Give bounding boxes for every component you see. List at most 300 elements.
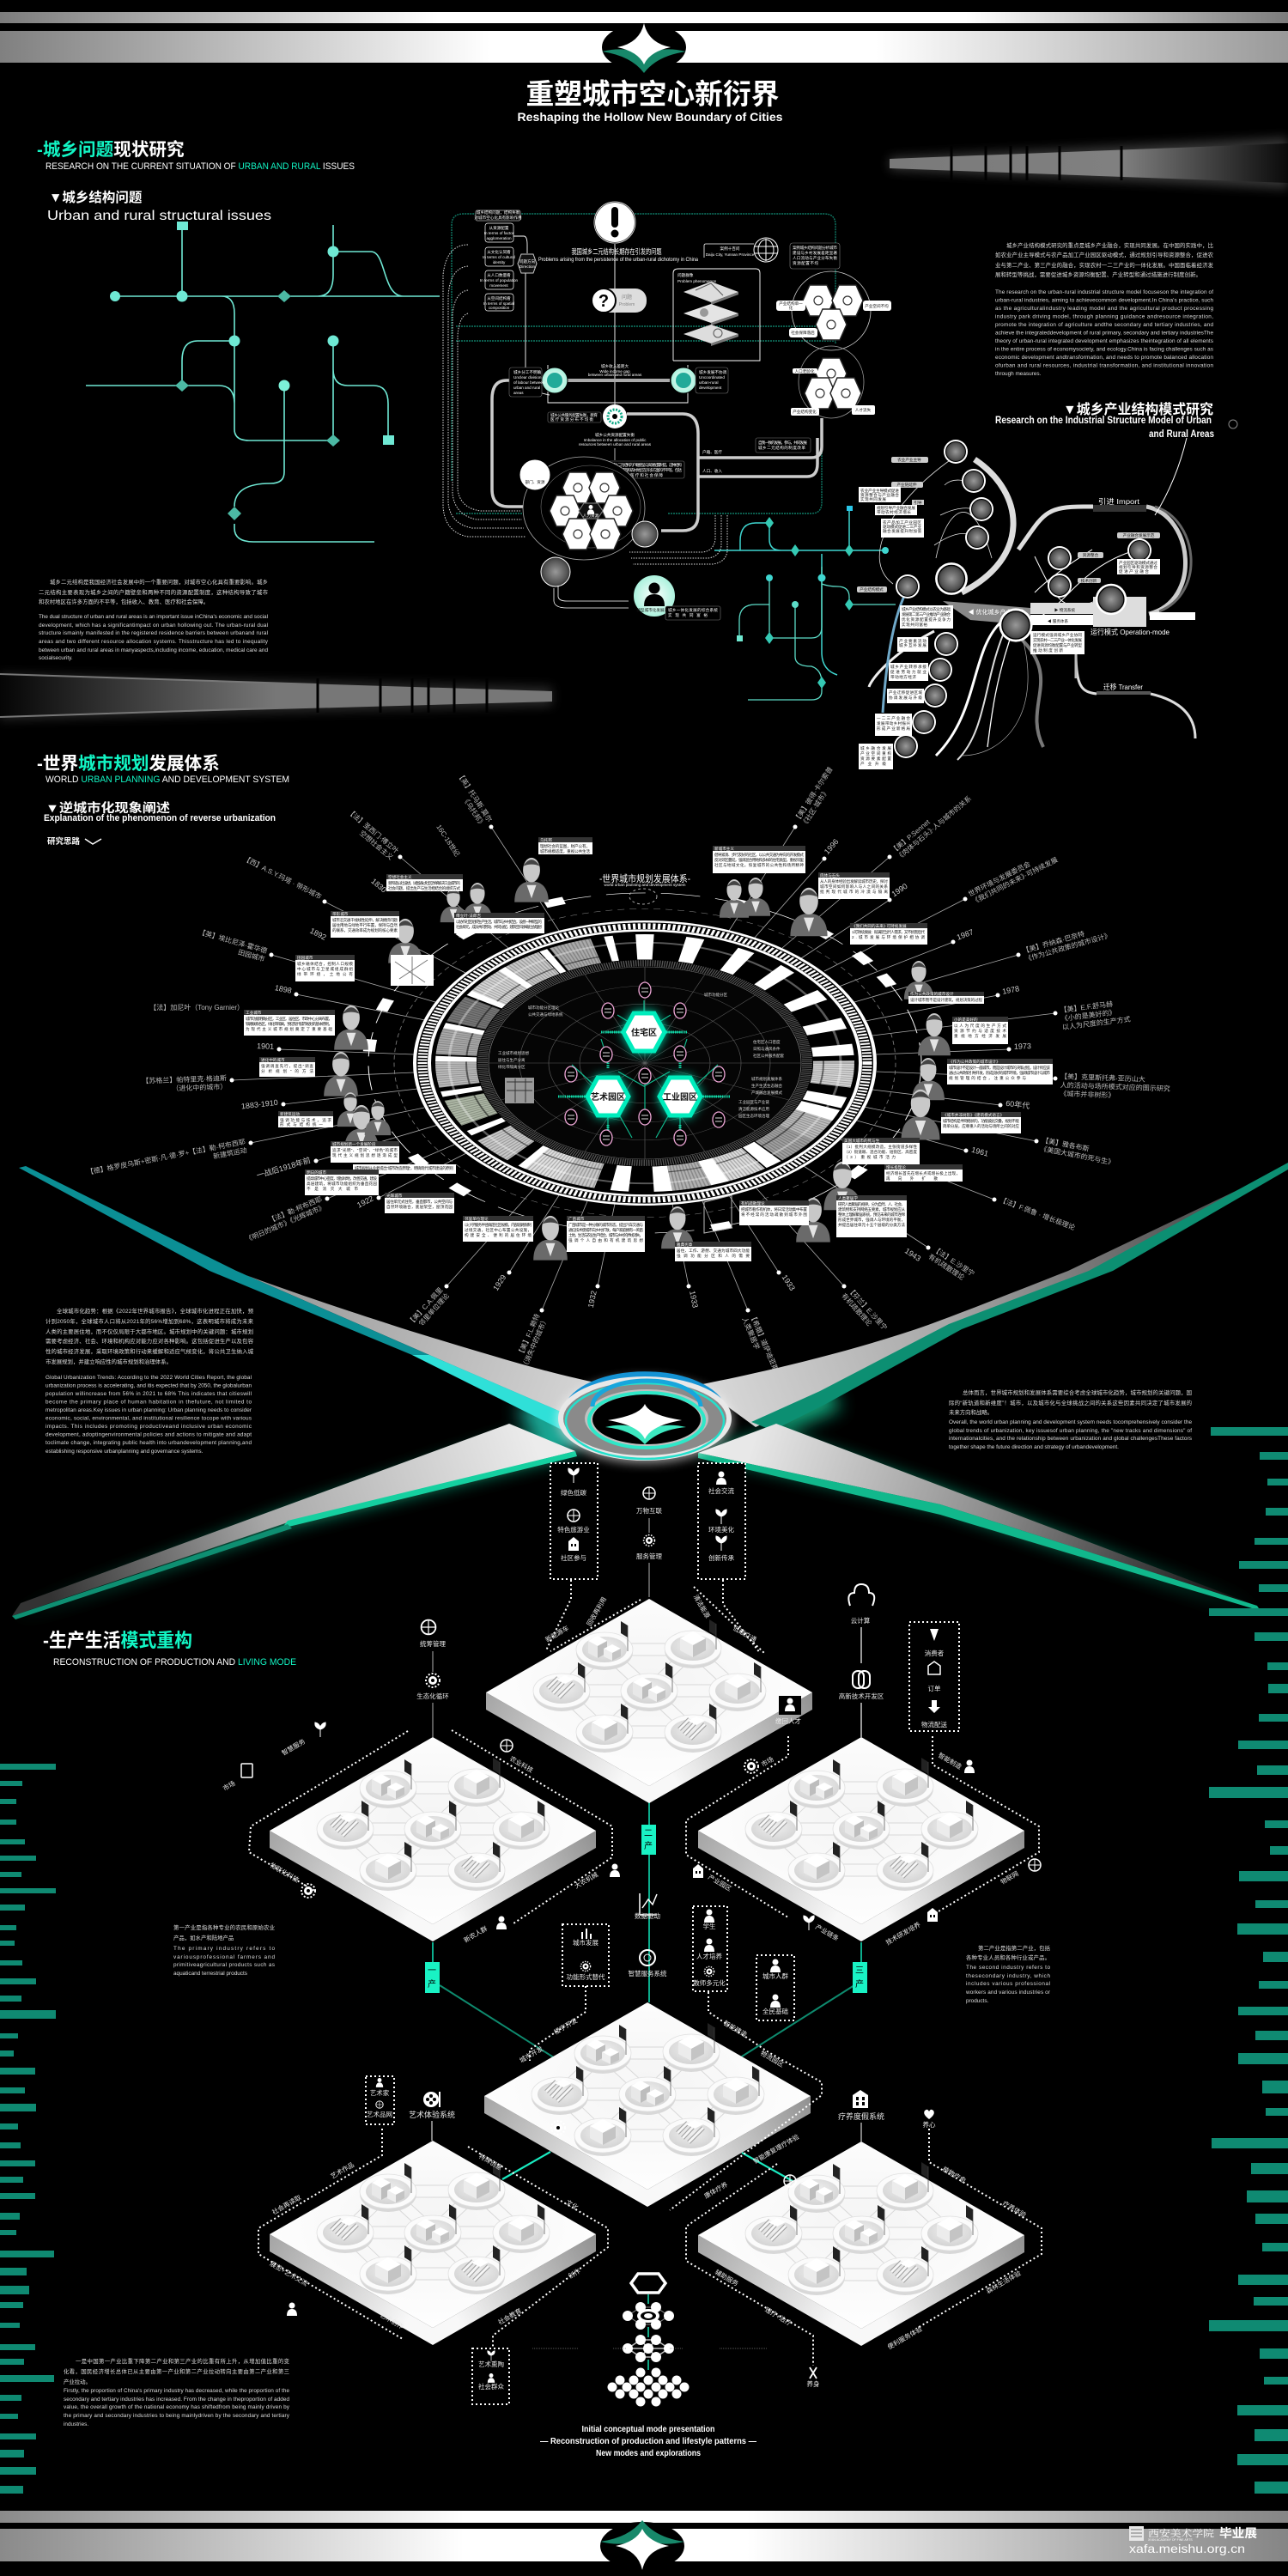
platform: smart service [484,2002,811,2207]
box: our common future: 2.城市发展与环境保护相协调 [852,934,925,940]
dotted box: green low carbon: 绿色低碳 [561,1488,586,1497]
box: garden city [295,955,355,981]
dotted box: green low carbon [550,1463,598,1579]
radial timeline labels: 《社区·城市》 [799,787,830,829]
tag: tertiary industry: 产 [855,1978,864,1990]
dotted box: consumer: 订单 [927,1684,941,1692]
icon: heart: 养心 [922,2120,936,2129]
radial timeline labels: 以人为尺度的生产方式 [1061,1014,1131,1031]
radial timeline labels: 【美】F.L.赖特 [516,1312,541,1358]
small tags and notes: 一二三产业融合 [877,715,910,721]
pink capsule nodes [565,982,725,1145]
box: neighbourhood: 以小学服务半径确定社区规模，内部道路限制 [465,1222,532,1228]
text block: primary industry: 第一产业是指各种专业的农民和原始农业 [173,1923,276,1931]
text block: industrial structure research: 展和转型等挑战，需要促进城乡资源均衡配置、产业转型和通过措施进行制度创新。 [995,270,1201,278]
text block: global urbanization: 性的城市经济发展，采取环境政策和行动来缓解和适应气候变化，将公共卫生纳入城 [46,1347,254,1355]
box: cities in evolution: 强调调查先行，提出"调查 [261,1063,313,1069]
problem row: labour division, income gap, uncoordinated development: 城乡分工不明确 [513,369,542,375]
text block: dual structure: structure ismainly manifested in the registered residence barriers between urbanand rural [39,630,268,636]
icon: gear node [603,404,627,428]
text block: primary industry: 产品，如水产和陆地产品 [173,1934,234,1941]
text block: global urbanization: become the primary place of human habitation in thefuture, not limited to [46,1400,252,1405]
text block: secondary industry: thesecondary industry, which [966,1973,1050,1979]
subheading: reverse urbanization: Explanation of the phenomenon of reverse urbanization [44,813,276,823]
radial timeline labels: 1830 [369,877,388,895]
small tags and notes: 发展带动乡村振兴 [877,720,910,726]
box: pattern: 《作为公共政策的城市设计》 [949,1059,1000,1065]
problem row: labour division, income gap, uncoordinated development: of labour between [513,380,545,385]
text box: person [665,606,720,620]
central hexagon cluster: 人力资源 [583,513,599,519]
inner notes: 住宅区人口密度 [753,1039,781,1045]
box: garden city: 田园城市 [297,955,313,961]
school logo text: XI'AN ACADEMY OF FINE ARTS [1148,2538,1193,2542]
icon: body care: 养身 [807,2379,820,2388]
box: ekistics [836,1195,907,1237]
text block: dual structure: development, which has a significantimpact on urban hollowing out. The urban-rural dual [39,623,268,629]
dotted box: urban development: 城市发展 [573,1938,598,1947]
inner notes: 生产生活生态融合 [751,1083,782,1089]
radial timeline labels: 【法】F.佩鲁 · 增长极理论 [999,1195,1077,1231]
platform edge labels: 产业园区 [707,1873,733,1893]
platform edge labels: 物联化科技 [269,1861,301,1884]
small tags and notes: 技术创新 [1081,578,1097,584]
central ring diagram [351,883,939,1243]
box: broadacre: 广亩城市是一种分散的城市形态，提出汽车交通与 [568,1222,643,1228]
icon: footer star logo [600,2520,684,2570]
icon: art system [409,2092,455,2141]
heading: problems arising: Problems arising from the persistence of the urban-rural dichotomy in China [538,257,698,263]
section heading: world urban planning [37,753,289,785]
small tags and notes: 促进劳动力就业 [890,669,927,675]
radial timeline labels: 1943 [903,1247,922,1263]
small tags and notes: 引导 [914,500,922,506]
radial timeline labels: 有机疏散理论 [840,1291,874,1327]
box: pattern [947,1059,1053,1084]
boxes and flow labels: 收入教育医疗和社会保障 [611,472,663,478]
radial timeline labels: （进化中的城市） [172,1082,227,1092]
problem group panel: Problem phenomenon [677,279,717,283]
boxes and flow labels: 城乡二元结构的制度改革 [758,445,805,451]
text block: industrial structure research: ofurban and rural resources, industrial transformation, and institutional innovation [995,362,1213,369]
box: our common future: 《我们共同的未来》·可持续发展 [852,923,907,929]
text block: dual structure: areas and two different resource allocation systems. Thisstructure has led to inequality [39,639,269,645]
small tags and notes: 城乡产业结构模式以农业为基础 [902,606,951,612]
box: broadacre: 土地，生活与农业生产结合，城市与乡村的界线消失， [568,1232,643,1238]
concept evolution diagram [532,2274,768,2406]
platform edge labels: 产业链条 [814,1923,841,1942]
caption: Initial conceptual mode presentation [582,2424,714,2434]
small tags and notes: 产业链延伸 [897,482,917,488]
box: death and life: （3）重视城市活力 [844,1154,896,1160]
platform edge labels: 植物疗愈 [941,2165,968,2184]
inner notes: 公共交通与绿地系统 [528,1012,563,1018]
inner notes: 园区生态环境治理 [738,1113,769,1119]
box: broadacre [567,1216,645,1252]
platform edge labels: 康体疗养 [702,2179,729,2200]
box: charter note: 城市规划从业者提出"城市改造原理"，明确现代城市建设的原则 [355,1165,453,1171]
central glow hexes: 住宅区 [631,1027,657,1038]
radial timeline labels: 【芬兰】E.沙里宁 [847,1285,889,1332]
text block: industry proportion: industries. [64,2421,88,2427]
text box: person: 城乡一体化发展的综合系统 [668,607,718,613]
radial timeline labels: 1898 [274,983,293,995]
box: utopian socialism [386,874,463,891]
box: growth pole: 再向外扩散 [886,1176,938,1182]
platform edge labels: 市场 [222,1778,237,1792]
text block: industrial structure research: 业与第二产业、第三产业的融合，实现农村一二三产业的一体化发展。中国面临着经济发 [995,261,1214,269]
right column: cloud: 高新技术开发区 [839,1692,884,1700]
title: Reshaping the Hollow New Boundary of Cities [517,110,783,124]
boxes and flow labels: 城乡二元结构的户籍壁垒与资源配置制度，这种结构 [611,462,682,468]
lower left arm [12,1424,577,1619]
text box: case: 人口流动与产业分布失衡 [793,255,837,261]
footer band [0,2511,1288,2570]
box: utopia: 城市规模适度，重视公共生活 [540,848,590,854]
box: new architecture [278,1111,333,1127]
radial timeline labels: 1996 [823,837,841,856]
text block: industry proportion [64,2357,290,2427]
text block: secondary industry: products. [966,1998,989,2004]
subheading: reverse urbanization: 研究思路 [47,836,81,847]
dotted box: social exchange: 创新传承 [708,1553,734,1562]
problem row: labour division, income gap, uncoordinated development: development [699,386,722,390]
section heading: production and living: RECONSTRUCTION OF PRODUCTION AND LIVING MODE [53,1657,296,1668]
dotted box: artists: 艺术家 [370,2088,390,2097]
box: flesh and stone: 从人的身体经验出发解读城市历史，探讨 [820,878,888,884]
side bars: right [1209,1427,1288,2494]
subheading: industrial structure model: Research on the Industrial Structure Model of Urban [995,414,1212,426]
small tags and notes: 融合发展提升附加值 [883,528,921,534]
text block: industrial structure research: through measures. [995,371,1042,377]
box: organic decentralization: 把城市看作有机体，将日常活动集中布置 [741,1206,807,1212]
dotted box: social exchange: 社会交流 [708,1486,734,1495]
problem row: labour division, income gap, uncoordinated development: Uncoordinated [699,375,725,380]
glow [12,1382,1257,1618]
school logo text [1129,2526,1257,2555]
box: small is beautiful [952,1017,1008,1044]
box: tomorrow city: 高层建筑，将城市功能组织为垂直花园 [307,1181,377,1187]
box: phalanx: 傅立叶·法郎吉 [456,913,481,919]
radial timeline labels: 广亩城市（消失中的城市） [509,1315,550,1395]
left question boxes: In terms of spatial [483,301,514,306]
box: new urbanism: 社区与地域文化，恢复城市的公共性和场所精神 [714,862,804,868]
platform edge labels: 创作 [567,2266,582,2280]
text block: secondary industry: 第二产业是指第二产业，包括 [978,1944,1051,1952]
small tags and notes: 资源要素配置 [860,756,891,762]
radial timeline labels: 有机疏散理论 [927,1252,966,1281]
side bars: left [0,1764,56,2494]
inner notes [498,992,784,1119]
dotted box: artists: 艺术品网 [367,2110,392,2118]
box: new architecture: 强调功能与技术，追求 [280,1117,331,1123]
small tags and notes: 带动农村经济增长 [877,509,911,515]
boxes and flow labels: 户籍、医疗 [702,449,722,455]
satellite discs: 部门、资源 [526,479,545,485]
box: charter note [353,1164,456,1174]
box: death and life: （2）街道眼、混合功能、短街区、高密度 [844,1149,917,1155]
left question boxes: In terms of factor [484,231,514,235]
problem row: labour division, income gap, uncoordinated development: 城乡收入差距大 [601,363,629,369]
text block: industrial structure research: promote the integration of agriculture andthe secondary and tertiary industries, and [995,322,1213,328]
hexagon cluster: upper right: 产业结构变化 [793,409,817,415]
dotted box: art edification: 社会群众 [478,2382,504,2391]
box: athens charter: 居住、工作、游憩、交通为城市四大功能 [677,1248,750,1254]
text block: primary industry: aquaticand terrestrial products [173,1971,247,1977]
small tags and notes: 协调发展与升级 [889,695,922,701]
platform edge labels: 回收再利用 [585,1595,608,1627]
box: neighbourhood [463,1216,533,1242]
box: pattern: 城市设计不是设计一座城市，而是设计城市的决策过程，设计师应该 [949,1065,1050,1071]
section heading: urban-rural research: RESEARCH ON THE CURRENT SITUATION OF URBAN AND RURAL ISSUES [46,161,355,172]
platform: top [486,1599,812,1803]
left column: ecology [416,1620,449,1737]
radial timeline labels: 【法】勒·柯布西耶 [267,1194,323,1224]
platform edge labels: 市场 [760,1754,775,1768]
tag: tertiary industry [853,1962,867,1993]
box: cities in evolution: 进化中的城市 [261,1057,285,1063]
problem row: labour division, income gap, uncoordinated development: urban and rural [513,386,540,390]
text block: primary industry [173,1923,276,1977]
outer tick rings [415,921,875,1205]
text block: global urbanization: urbanization process is accelerating, and itis expected that by 2050, the globalurban [46,1382,252,1389]
problem row: labour division, income gap, uncoordinated development: Unclear division [513,375,542,380]
dotted box: students: 学生 [702,1922,716,1930]
left question boxes: agglomeration [486,236,512,240]
heading: problems arising [538,247,698,263]
box: death and life: 美国大城市的死与生 [844,1138,880,1144]
inner notes: 清洁能源技术应用 [738,1106,769,1112]
text block: global urbanization: 市发展规划，并建立响应性的城市规划和治理体系。 [46,1358,172,1365]
text block: secondary industry: workers and various industries or [965,1990,1051,1996]
radial timeline labels: 【美】P.Sennet [889,817,932,855]
box: small is beautiful: 重视地方经济发展 [954,1033,1006,1039]
dotted box: students: 教师多元化 [693,1978,726,1987]
isometric platforms [270,1599,1024,2346]
tag: secondary industry [641,1825,656,1855]
box: bauhaus: 追求"光明"、"空间"、"绿色"的城市 [332,1147,398,1153]
radial timeline labels: 【美】雅各布斯 [1042,1135,1090,1153]
text block: dual structure [39,578,269,661]
platform edge labels: 城市开发 [518,2044,544,2064]
dotted box: art edification [472,2348,509,2404]
box: cities in evolution [259,1057,315,1077]
icon: talent card [775,1696,801,1725]
box: new urbanism: 倡导紧凑、步行友好的社区，以公共交通为导向的开发模式 [714,852,804,858]
box: tomorrow city: 不是消灭大城市 [307,1186,358,1192]
box: ekistics: 人类聚居学 [838,1195,858,1201]
text: public resource imbalance: 城乡公共资源配置失衡 [595,432,635,438]
case label: 案例十百问 [720,246,740,252]
text block: industrial structure research: economic development andtransformation, and needs to promote balanced allocation [995,355,1213,361]
radial timeline labels: 【英】埃比尼泽·霍华德 [197,927,268,955]
stage labels: 迁移 Transfer [1103,683,1143,691]
platform: art experience [270,2141,596,2345]
box: linear city: 带形城市 [332,911,349,917]
dotted box: students: 人才培养 [696,1952,722,1960]
problem row: labour division, income gap, uncoordinated development: Wide income gap [599,369,630,374]
icon: smart service system: 智慧服务系统 [629,1969,667,1978]
text block: industrial structure research [995,241,1214,377]
box: small is beautiful: 以人为尺度的生产方式 [954,1023,1006,1029]
box: growth pole: 增长极理论 [886,1164,906,1170]
center column icons: 服务管理 [636,1552,662,1560]
radial timeline labels: 1901 [257,1042,274,1051]
teal frame lines [452,214,835,513]
box: industrial city: 工业城市 [246,1010,262,1016]
dotted box: urban development: 功能形式替代 [567,1972,605,1981]
school logo text: 西安美术学院 [1148,2527,1214,2539]
inner notes: 工业园区与产业链 [738,1099,769,1105]
radial timeline labels: 1932 [586,1290,598,1309]
text box: case [790,243,840,269]
radial timeline labels: 16C-18世纪 [434,823,462,858]
box: garden city: 绿带环绕，土地公有 [297,971,353,977]
case label: Daiju City, Yunnan Province [706,252,755,257]
left question boxes: 城乡结构问题，结构失衡 [477,210,520,216]
box: bauhaus: 城市规划新一个发展阶段 [332,1141,376,1147]
text block: overall: 未来方向和战略。 [949,1408,993,1416]
text: public resource imbalance: Imbalance in the allocation of public [584,438,647,442]
radial timeline labels: 邻里单位理论 [416,1291,451,1327]
text block: secondary industry [965,1944,1051,2004]
radial timeline labels: 工业城市 [244,1012,271,1020]
text block: global urbanization: 需要考虑经济、社会、环境和机构应对能力应对各种影响。这包括促进生产以及包容 [46,1337,254,1345]
text block: dual structure: socialsecurity. [39,655,73,661]
box: phalanx: 以协作社区组织生产生活，城市与乡村结合，设想一种新型的 [456,919,542,925]
left question boxes: 从空间结构看 [487,295,511,301]
box: utopian socialism: 社会问题，提出生产与生活相结合的组织方式 [388,885,460,891]
icon: talent card: 缴回人才 [775,1716,801,1725]
platform edge labels: 新农人群 [462,1923,489,1944]
radial timeline labels: 1978 [1001,984,1020,996]
radial timeline labels: 【美】E.F.舒马赫 [1060,999,1114,1014]
text block: global urbanization: metropolitan areas.Key issues in urban planning: Urban planning needs to consider [46,1407,252,1413]
box: organic decentralization [739,1200,809,1225]
text block: industry proportion: value, the overall growth of the national economy has shiftedfrom being mainly driven by [64,2404,290,2410]
left question boxes [474,210,522,311]
network diagram left [86,222,440,542]
dotted outlines around platforms [249,1580,1042,2366]
upper right arm [698,1163,1288,1431]
small tags and notes: 实现农村一二三产业一体化发展 [1033,637,1082,643]
caption: — Reconstruction of production and lifestyle patterns — [540,2436,756,2446]
box: radiant city [385,1193,454,1213]
platform edge labels: 新能源车 [544,1623,570,1643]
platform edge labels: 农业科技 [508,1754,535,1774]
text block: overall: global trends of urbanization, key issuesof urban planning, the "new tracks and dimensions" of [949,1428,1192,1434]
box: utopia: 理想社会的蓝图，财产公有， [540,843,590,849]
platform: secondary industry [698,1737,1024,1941]
small tags and notes: 产业迁移促进区域 [889,690,922,696]
decorative strip: upper right [890,137,1288,189]
box: athens charter: 雅典宪章 [677,1242,693,1248]
dotted box: citizens: 城市人群 [762,1971,788,1980]
text block: industrial structure research: theory of urban-rural integrated development emphasizes theintegration of all elements [995,338,1213,344]
box: pattern: 规划管理的结合，注重公众参与 [949,1075,1026,1081]
box: bauhaus: 现代主义规划思想逐渐成型 [332,1152,398,1158]
icon: data driven: 数据驱动 [635,1911,660,1920]
radial timeline labels: 1883-1910 [240,1098,278,1111]
box: new urbanism: 新城市主义 [714,846,734,852]
radial timeline labels: 【美】克里斯托弗·亚历山大 [1060,1072,1145,1084]
text: public resource imbalance [579,432,652,460]
text block: global urbanization: 计到2050年，全球城市人口将从2021年的56%增加到68%，这表明城市将成为未来 [46,1317,254,1325]
text block: primary industry: variousprofessional farmers and [173,1954,275,1960]
box: radiant city: 光辉城市 [386,1193,403,1199]
boxes and flow labels: 医疗资源分布不均衡 [550,416,593,422]
box: our common future: 1.可持续发展：既满足当代人需求，又不损害后代 [852,929,925,935]
text block: industry proportion: Firstly, the proportion of China's primary industry has decreased, while the proportion of the [64,2388,289,2394]
tag: tertiary industry: 三 [855,1966,864,1976]
box: semi-lattice: 简单分层，应尊重人的活动与场所之间的对应 [943,1123,1019,1129]
radial timeline labels: 1933 [781,1273,797,1292]
small tags and notes: 推动制度创新 [1033,647,1063,653]
text block: global urbanization: 全球城市化趋势：根据《2022年世界城市报告》，全球城市化进程正在加快，预 [57,1307,254,1315]
platform edge labels: 疗养体验 [1001,2199,1028,2219]
left question boxes: 从文化认同看 [487,249,511,255]
smart service column [562,1893,794,2020]
school logo text: xafa.meishu.org.cn [1129,2542,1245,2555]
radial timeline labels: 1961 [970,1145,989,1158]
icon: globe [754,238,778,262]
box: ekistics: 建筑物和支持网络五要素，城市规划应从 [838,1206,905,1212]
inner notes: 城市功能分区理论 [528,1005,559,1011]
box: neighbourhood: 邻里单位理论 [465,1216,489,1222]
box: linear city: 的联系，交通效率成为规划的核心要素 [332,927,398,933]
radial timeline labels: 1933 [688,1290,700,1309]
ribbon and central blocks: ◀ 服务体系 [1048,618,1069,624]
text block: overall: Overall, the world urban planning and development system needs tocomprehensively consider the [949,1419,1192,1425]
icon: body care [807,2367,820,2388]
box: organic decentralization: 将不经常的活动疏散到城市外围 [741,1212,807,1218]
box: radiant city: 自然环境融合，底层架空，屋顶花园 [386,1204,453,1210]
network lines and hexagons [558,1000,730,1142]
platform edge labels: 便利服务体验 [886,2324,924,2351]
icon: question capsule [592,289,647,313]
dotted box: green low carbon: 特色旅游业 [557,1525,590,1534]
text block: industrial structure research: The research on the urban-rural industrial structure model focuseson the integration of [995,289,1213,295]
text block: secondary industry: includes various professional [966,1981,1050,1987]
platform: primary industry [270,1737,596,1941]
right column: cloud: 云计算 [851,1616,871,1625]
small tags and notes: 运行模式强调城乡产业协同 [1033,632,1082,638]
box: garden city: 城乡磁体结合，控制人口规模 [297,961,353,967]
text block: overall: 际的“新轨道和新维度”！城市，以及城市化与全球挑战之间的关系这些因素共同决定了城市发展的 [949,1399,1192,1406]
box: radiant city: 居住单元式住宅，垂直都市，公共空间与 [386,1199,453,1205]
network diagram right [714,506,896,700]
text box: case: 建设与乡村发展差距显著 [793,250,837,256]
ribbon and central blocks: ▶ 物流系统 [1054,607,1076,613]
radial timeline labels: 【法】加尼叶（Tony Garnier） [149,1003,244,1012]
left question boxes: 对城市空心化具有影响作用 [474,215,522,221]
platform edge labels: 清洁能源 [692,1593,713,1619]
platform edge labels: 展览+艺术交流 [269,2259,310,2287]
central hexagon cluster [523,457,645,560]
box: semi-lattice: 《城市并非树形》《建筑模式语言》 [943,1112,1004,1118]
text block: global urbanization: population willincrease from 56% in 2021 to 68% This indicates that citieswill [46,1391,252,1397]
direction hexagon: Direction [519,264,536,269]
photo nodes [894,440,1151,758]
box: broadacre: 广亩城市 [568,1216,585,1222]
radial timeline labels: 【美】乔纳森·巴奈特 [1022,929,1085,955]
connector stems [647,2294,649,2370]
hexagon cluster: upper right [776,271,891,418]
radial timeline labels: 新建筑运动 [212,1145,247,1161]
portraits [324,858,951,1261]
platform edge labels: 低碳交通 [732,1624,758,1643]
radial timeline labels: 一战后1918年前 [255,1155,312,1180]
